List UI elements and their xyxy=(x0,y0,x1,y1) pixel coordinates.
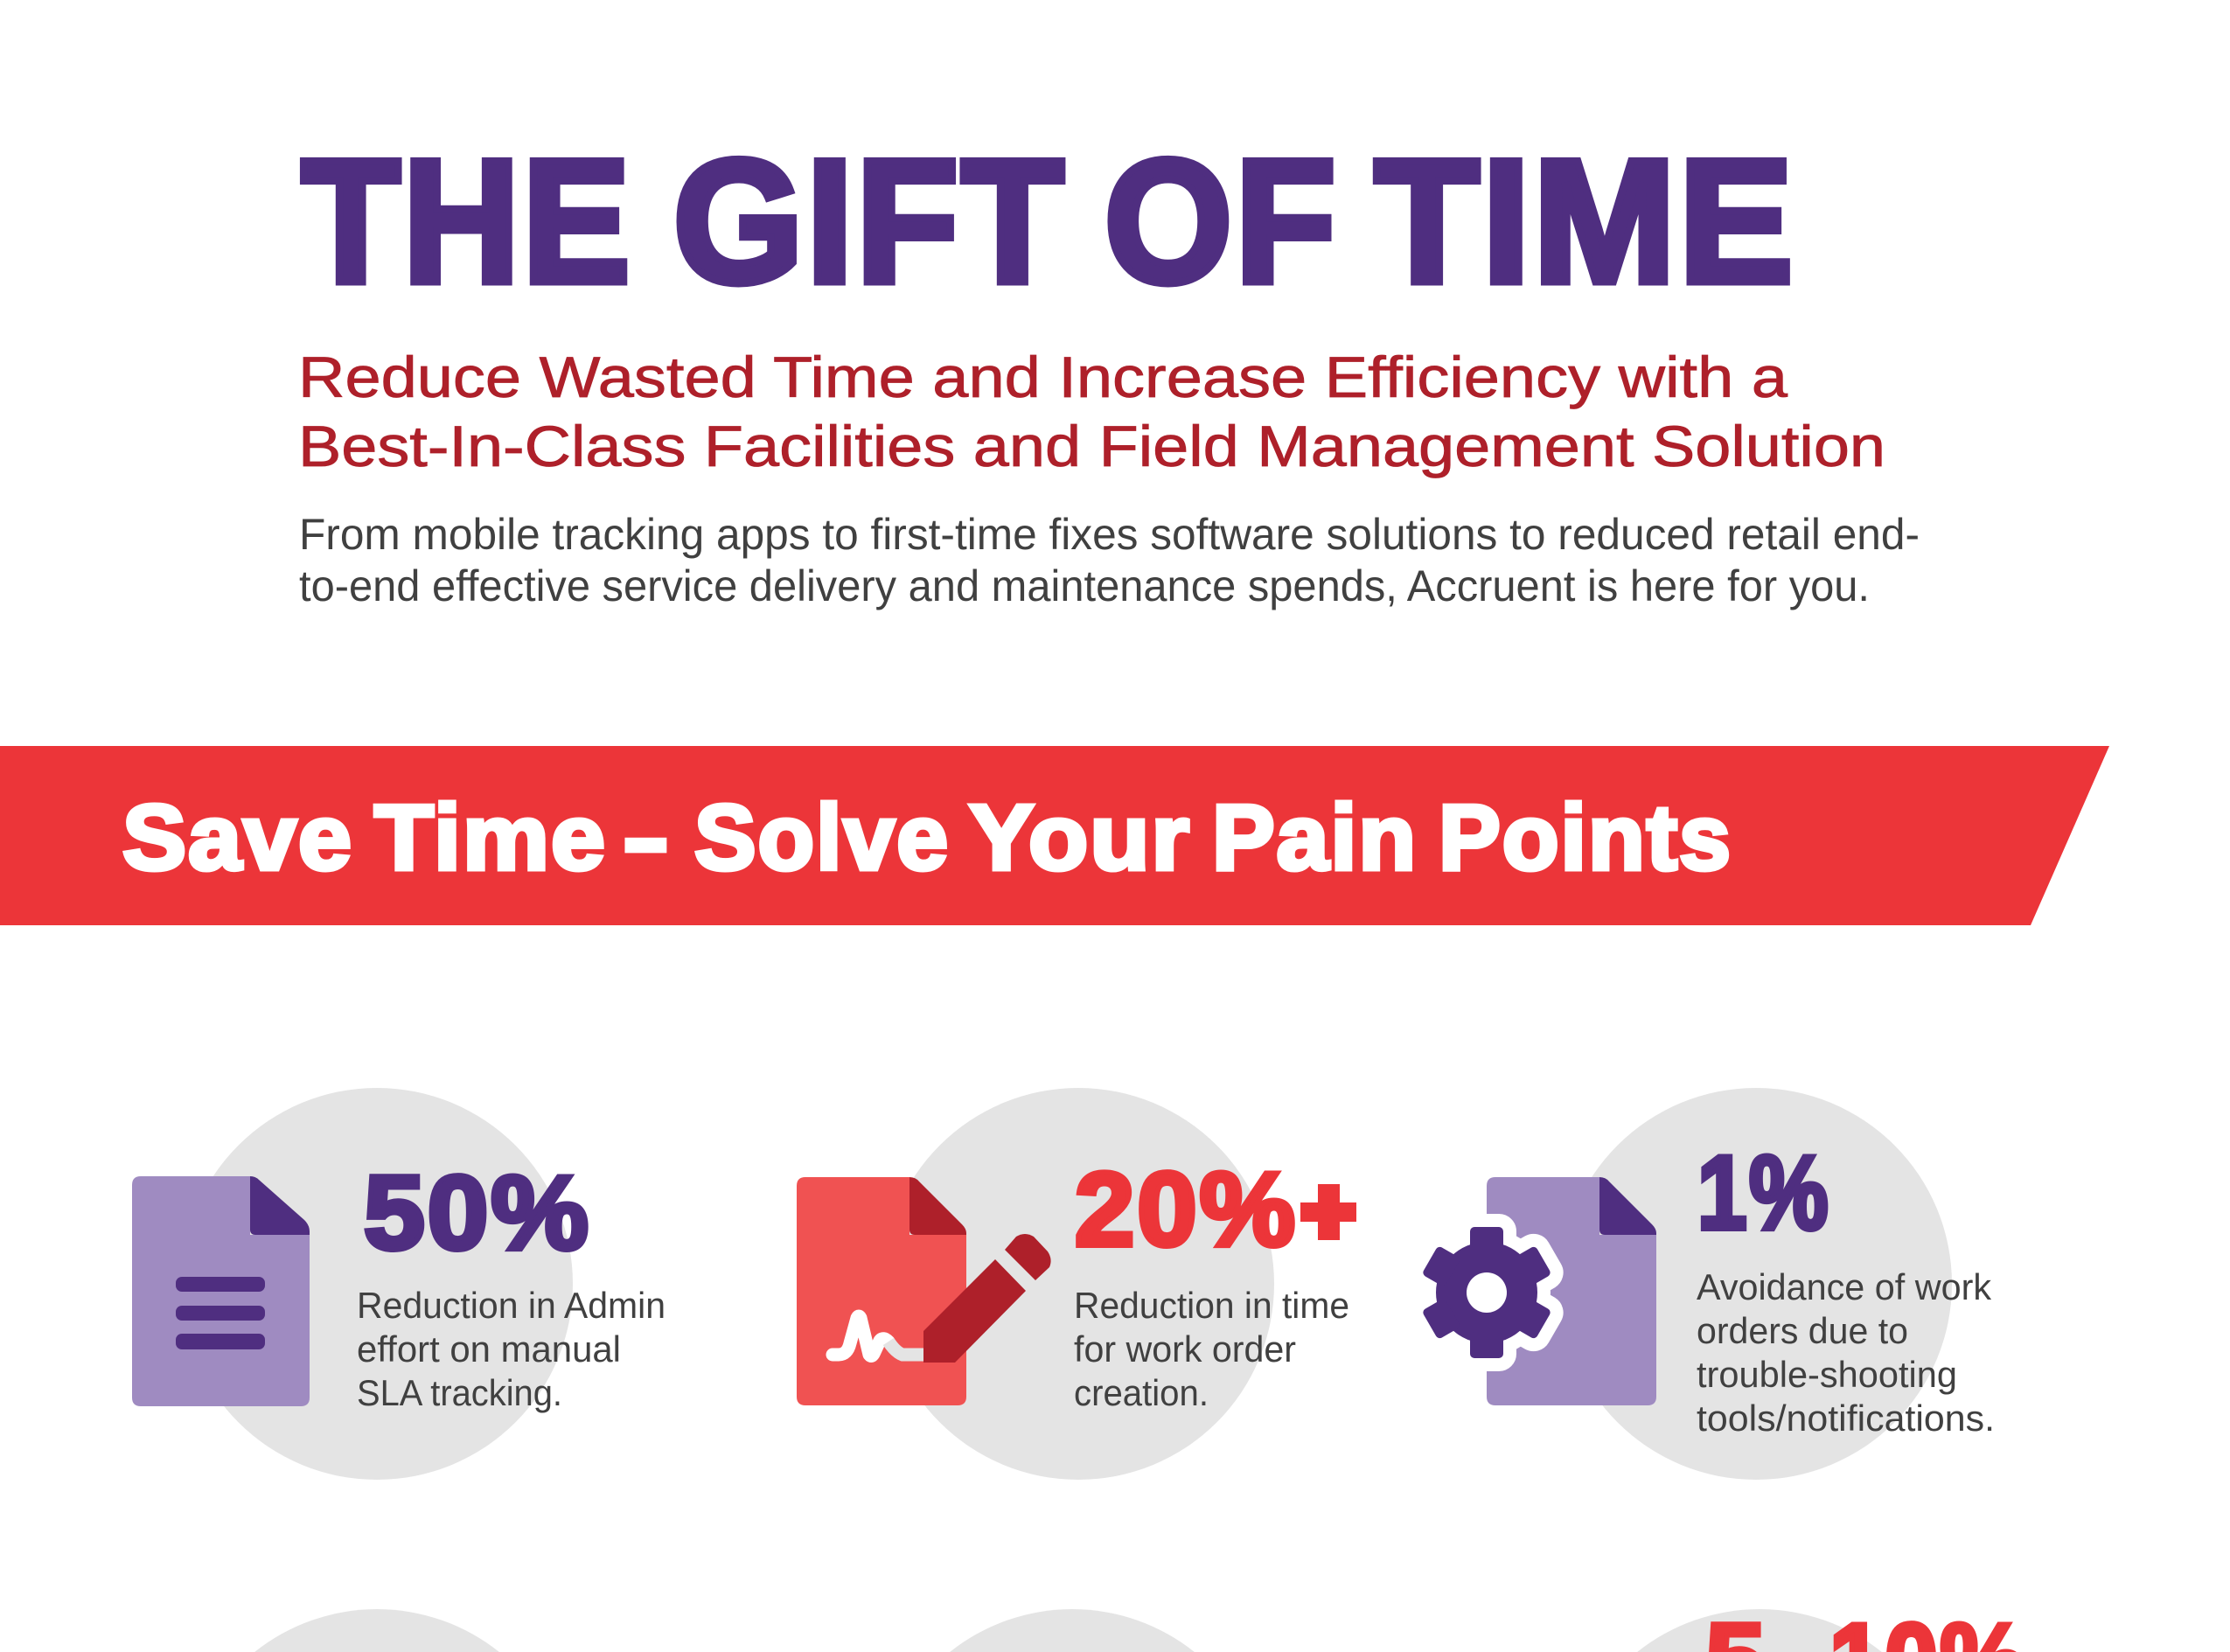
description: Reduction in Admin xyxy=(357,1285,666,1326)
intro text: From mobile tracking apps to first-time fixes software solutions to reduced retail end- xyxy=(299,510,1920,559)
panel: lower right stat xyxy=(1637,1602,2027,1652)
stat: 20%+: 20% xyxy=(1075,1151,1298,1268)
description: tools/notifications. xyxy=(1697,1398,1995,1439)
banner heading: Points xyxy=(1439,786,1732,889)
title xyxy=(302,124,1796,319)
title: THE xyxy=(302,124,633,319)
panel: avoided work orders stat xyxy=(1422,1088,1995,1480)
subtitle xyxy=(298,345,1885,478)
panel: work order creation stat xyxy=(797,1088,1356,1480)
banner heading: Solve xyxy=(694,786,950,889)
description: orders due to xyxy=(1697,1310,1908,1351)
subtitle: Best-In-Class Facilities and Field Management Solution xyxy=(298,414,1885,478)
title: GIFT xyxy=(673,124,1067,319)
icon: document with gear xyxy=(1422,1177,1656,1405)
icon: document with pen and signature xyxy=(797,1177,1051,1405)
panel: lower left circle xyxy=(254,1609,499,1652)
description: creation. xyxy=(1074,1372,1209,1413)
panel: admin effort stat xyxy=(132,1088,666,1480)
banner heading: - xyxy=(623,786,672,889)
panel: lower middle circle xyxy=(950,1609,1195,1652)
description: trouble-shooting xyxy=(1697,1354,1957,1395)
title: OF xyxy=(1105,124,1339,319)
description: effort on manual xyxy=(357,1328,621,1370)
title: TIME xyxy=(1375,124,1796,319)
banner heading: Time xyxy=(374,786,607,889)
stat: 5-10% xyxy=(1705,1602,2027,1652)
banner heading: Your xyxy=(969,786,1191,889)
subtitle: Reduce Wasted Time and Increase Efficiency with a xyxy=(298,345,1787,409)
banner heading: Pain xyxy=(1212,786,1418,889)
description: for work order xyxy=(1074,1328,1296,1370)
description xyxy=(1074,1285,1349,1413)
description: Avoidance of work xyxy=(1697,1266,1992,1307)
stat: 1%: 1% xyxy=(1697,1134,1830,1251)
description: SLA tracking. xyxy=(357,1372,562,1413)
intro text: to-end effective service delivery and maintenance spends, Accruent is here for you. xyxy=(299,561,1870,610)
description xyxy=(1697,1266,1995,1439)
icon: document with lines xyxy=(132,1176,310,1406)
description xyxy=(357,1285,666,1413)
banner heading xyxy=(122,786,1732,889)
description: Reduction in time xyxy=(1074,1285,1349,1326)
banner heading: Save xyxy=(122,786,353,889)
stat: 50%: 50% xyxy=(364,1154,591,1272)
section banner xyxy=(0,746,2109,925)
intro text xyxy=(299,510,1920,610)
